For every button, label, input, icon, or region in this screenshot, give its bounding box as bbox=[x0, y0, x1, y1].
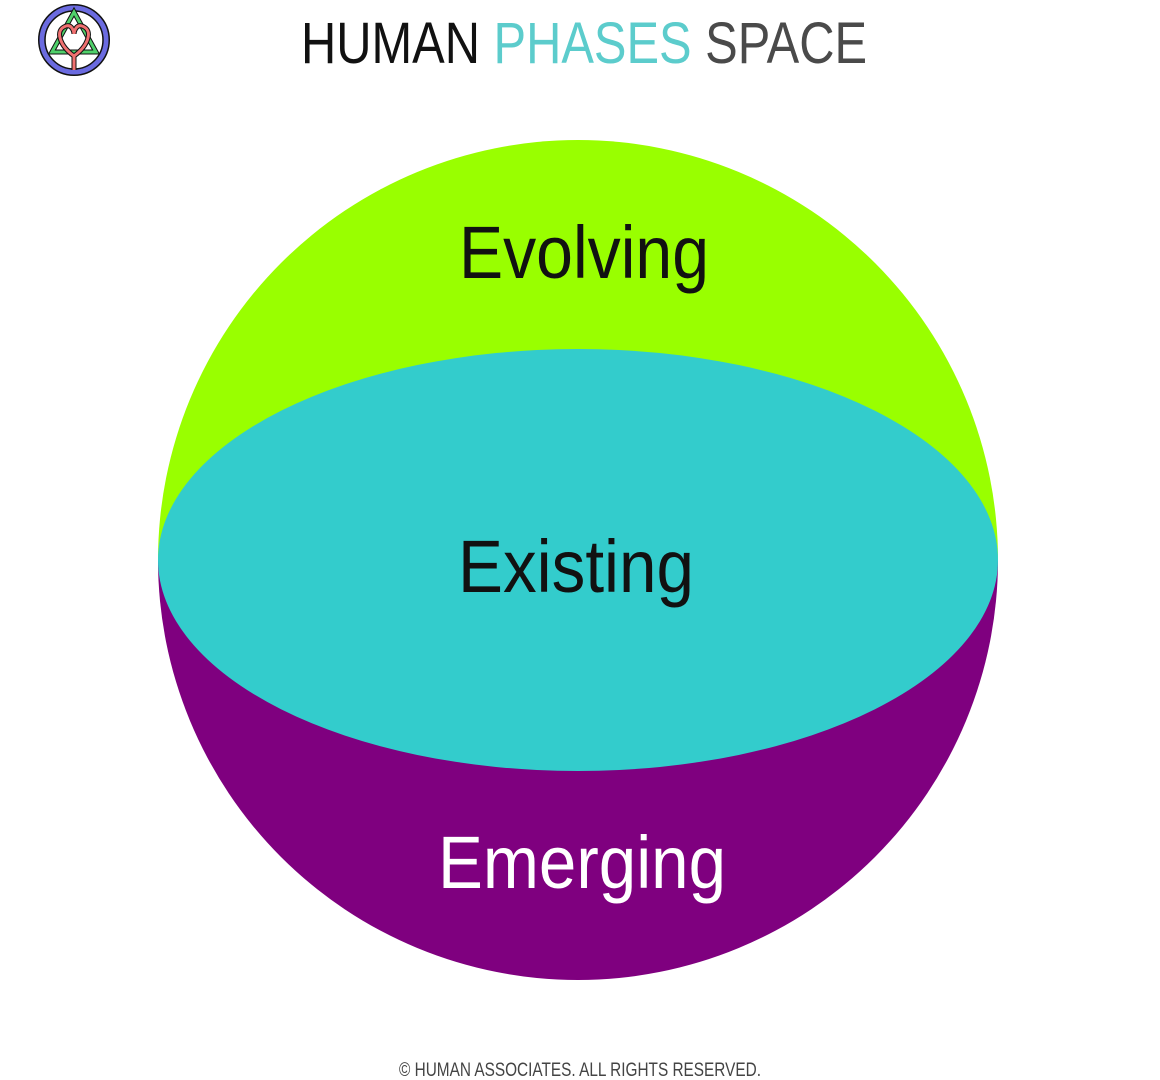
sphere diagram bbox=[158, 140, 998, 980]
segment: existing (middle ellipse) bbox=[158, 349, 998, 771]
icon: logo bbox=[39, 5, 109, 75]
label: Existing: Existing bbox=[458, 525, 694, 608]
label: Emerging: Emerging bbox=[438, 821, 726, 904]
segment: emerging (bottom) bbox=[158, 560, 998, 980]
title: HUMAN PHASES SPACE bbox=[301, 11, 867, 76]
label: Evolving: Evolving bbox=[459, 211, 709, 294]
segment: evolving (top) bbox=[158, 140, 998, 560]
